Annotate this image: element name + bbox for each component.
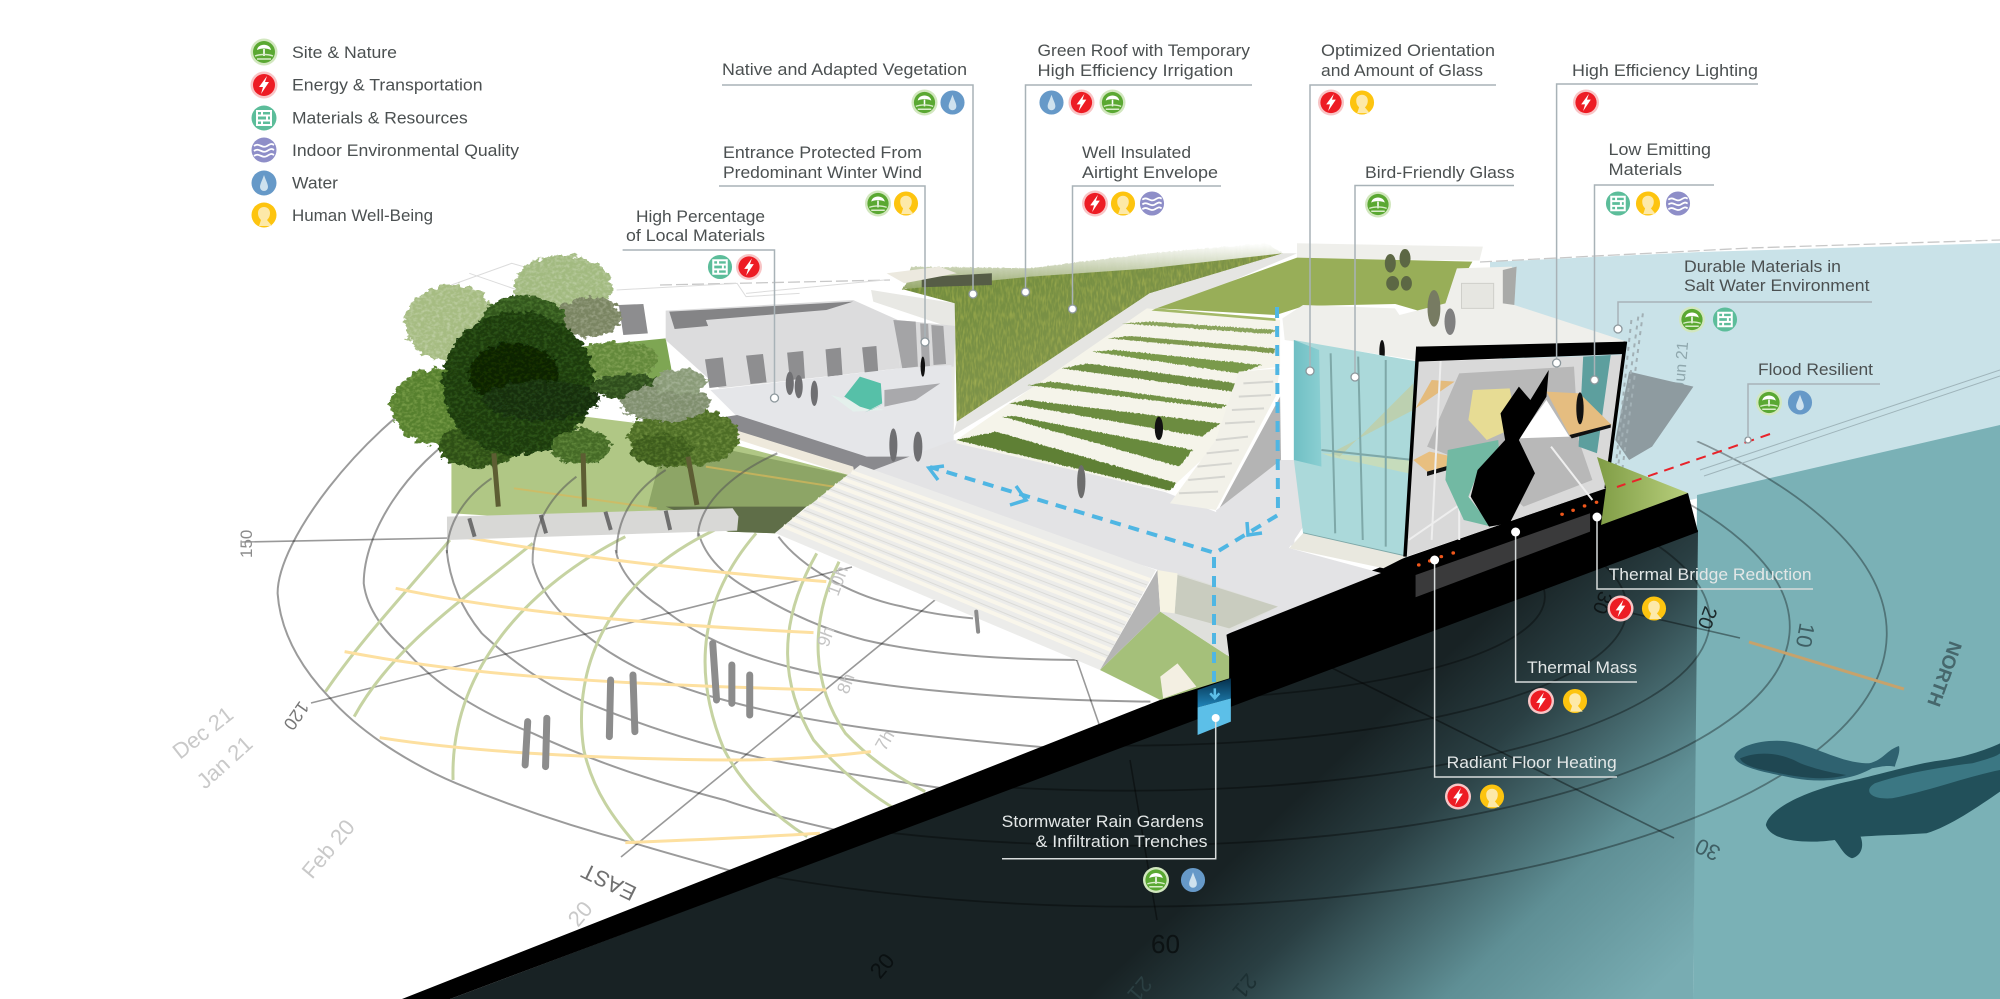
callout: thermal bridge reduction	[1592, 512, 1813, 622]
legend: human well-being: Human Well-Being	[292, 206, 433, 225]
dial labels: 7h	[871, 727, 898, 754]
dial labels: 20	[563, 896, 598, 931]
callout: green roof	[1022, 41, 1252, 296]
legend: water	[252, 170, 338, 196]
callout: radiant floor heating: Radiant Floor Heating	[1447, 753, 1617, 772]
stormwater flow path	[929, 307, 1278, 690]
dial labels: Jan 21	[192, 731, 257, 794]
radial lines	[242, 370, 2000, 920]
sculpture	[831, 377, 884, 413]
callout: well insulated airtight envelope: Well Insulated	[1082, 143, 1191, 162]
legend: indoor environmental quality: Indoor Environmental Quality	[292, 141, 520, 160]
site model	[391, 243, 1688, 767]
callout: high efficiency lighting: High Efficiency Lighting	[1572, 61, 1758, 80]
callout: optimized orientation: Optimized Orientation	[1321, 41, 1495, 60]
underground gradient	[450, 530, 1698, 999]
dial labels: Dec 21	[168, 701, 238, 764]
small whale	[1734, 741, 1899, 781]
dial labels	[168, 341, 1965, 999]
dial labels: 120	[279, 698, 313, 734]
callout: low emitting materials	[1590, 140, 1714, 384]
callout: thermal bridge reduction: Thermal Bridge Reduction	[1609, 565, 1812, 584]
plaza building	[666, 290, 956, 440]
callout: flood resilient: Flood Resilient	[1758, 360, 1873, 379]
large whale	[1766, 743, 2000, 858]
callout: thermal mass	[1511, 528, 1637, 714]
upper plaza people	[786, 357, 925, 462]
dial labels: 20	[865, 948, 900, 983]
legend: energy and transportation	[250, 72, 483, 98]
glass curtain wall	[1289, 340, 1418, 568]
lawn and low wall	[447, 338, 855, 540]
callout: green roof: Green Roof with Temporary	[1038, 41, 1251, 60]
callout: local materials	[623, 207, 778, 402]
legend: materials and resources	[252, 106, 468, 130]
sun paths, hour arcs	[345, 535, 871, 843]
callout: entrance protected	[719, 143, 929, 346]
callout: native and adapted vegetation: Native and Adapted Vegetation	[722, 60, 967, 79]
callout: high efficiency lighting	[1553, 61, 1758, 367]
roof people silhouettes	[1385, 249, 1456, 335]
legend: energy and transportation: Energy & Transportation	[292, 76, 483, 94]
legend	[250, 38, 520, 228]
roof terrace	[1157, 243, 1483, 317]
dial labels: 20	[1693, 603, 1721, 632]
legend: water: Water	[292, 174, 338, 192]
people on terraces	[1077, 417, 1163, 498]
upper plaza	[706, 365, 954, 477]
plaza people	[525, 612, 978, 767]
main building upper floor	[1282, 267, 1627, 363]
polar rings over water and ground	[774, 441, 1888, 908]
dial labels: EAST	[578, 858, 640, 906]
callout: optimized orientation	[1306, 41, 1496, 375]
dial labels: 30	[1691, 833, 1724, 866]
green roof	[887, 243, 1297, 435]
dial labels: Jun 21	[1671, 341, 1692, 390]
section cut interior	[1405, 342, 1627, 557]
dial labels: 09	[1151, 929, 1180, 959]
dial labels: 9h	[813, 624, 839, 649]
callout: low emitting materials: Materials	[1608, 160, 1682, 179]
callout: flood resilient	[1745, 360, 1880, 443]
dial labels: 10	[1791, 621, 1820, 650]
rain garden	[1100, 570, 1278, 700]
dial labels: 8h	[833, 671, 859, 696]
callout: durable materials	[1614, 257, 1872, 333]
callout: native and adapted vegetation	[722, 60, 977, 298]
callout: thermal mass: Thermal Mass	[1527, 658, 1637, 677]
callout: durable materials: Salt Water Environment	[1684, 276, 1870, 295]
callout: local materials: High Percentage	[636, 207, 765, 226]
deep water	[1693, 425, 2000, 999]
whales	[1734, 741, 2000, 858]
callout: bird-friendly glass: Bird-Friendly Glass	[1365, 163, 1514, 182]
dial labels: 10h	[823, 563, 852, 598]
main stair	[775, 465, 1156, 670]
callout: stormwater rain gardens: Stormwater Rain Gardens	[1002, 812, 1204, 831]
legend: human well-being	[252, 202, 433, 228]
water edge dashed line	[660, 240, 2000, 285]
callout: bird-friendly glass	[1351, 163, 1514, 381]
polar rings on the white ground	[278, 385, 1150, 880]
red flood line	[1617, 434, 1770, 487]
callout: green roof: High Efficiency Irrigation	[1038, 61, 1233, 80]
legend: site and nature: Site & Nature	[292, 43, 397, 62]
sun paths, month arcs	[325, 530, 925, 843]
callout: entrance protected: Predominant Winter Wind	[723, 163, 922, 182]
callout: low emitting materials: Low Emitting	[1608, 140, 1711, 159]
dial labels: NORTH	[1922, 638, 1965, 709]
tree trunks	[494, 453, 697, 507]
callout: entrance protected: Entrance Protected From	[723, 143, 922, 162]
salt water surface	[1490, 243, 2000, 500]
terrace seating	[956, 308, 1303, 547]
callout: local materials: of Local Materials	[626, 226, 765, 245]
callout: radiant floor heating	[1430, 556, 1617, 810]
callout: durable materials: Durable Materials in	[1684, 257, 1841, 276]
callout: optimized orientation: and Amount of Glass	[1321, 61, 1483, 80]
legend: site and nature	[250, 38, 397, 66]
callout: well insulated airtight envelope: Airtight Envelope	[1082, 163, 1218, 182]
legend: materials and resources: Materials & Resources	[292, 108, 468, 128]
building shadow on water	[1615, 313, 1693, 470]
dial rings over lawn and wall	[447, 453, 777, 563]
dial labels: 150	[237, 530, 256, 558]
callout: well insulated airtight envelope	[1068, 143, 1221, 313]
stormwater pit	[1198, 678, 1231, 735]
trees	[391, 255, 739, 468]
dial labels: Feb 20	[297, 815, 360, 883]
callout: stormwater rain gardens: & Infiltration Trenches	[1036, 832, 1208, 851]
sun path polar diagram	[168, 303, 2000, 999]
legend: indoor environmental quality	[252, 138, 520, 162]
main plaza	[855, 440, 1381, 635]
thermal strip and heating dots	[1416, 501, 1598, 597]
sloped lawn at corner	[1597, 457, 1688, 525]
background buildings faint	[451, 263, 884, 335]
dial labels: 30	[1588, 588, 1616, 617]
black section cut band	[402, 488, 1698, 999]
callout: stormwater rain gardens	[1002, 714, 1220, 893]
